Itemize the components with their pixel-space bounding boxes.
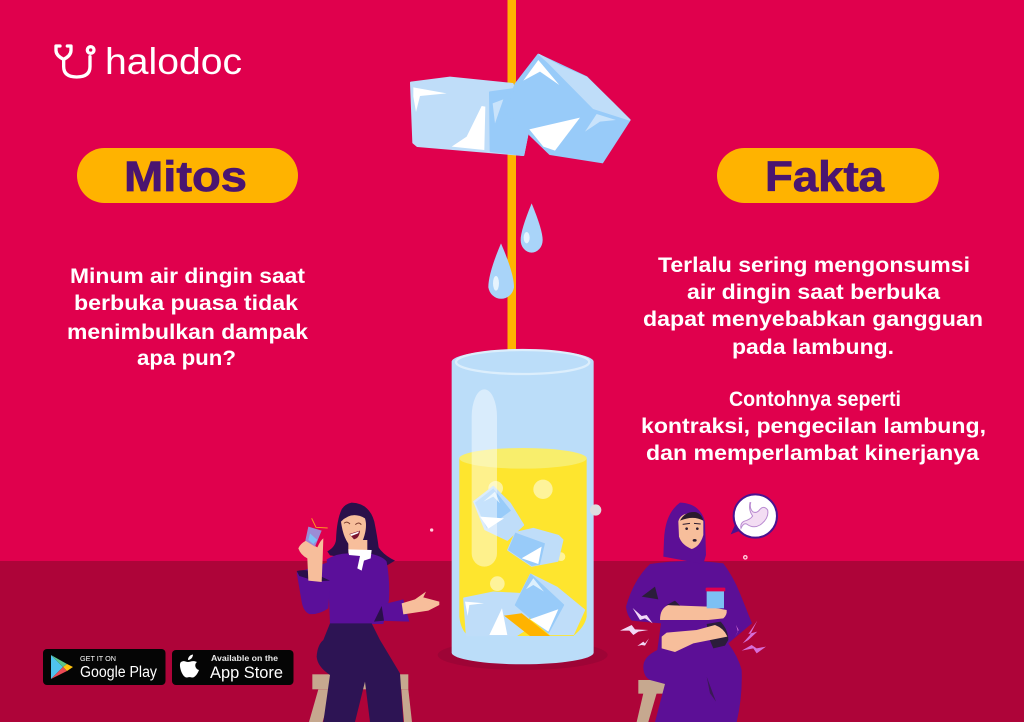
- text: fakta statement: Terlalu sering mengonsumsi: [658, 254, 970, 277]
- trousers: [317, 623, 403, 722]
- illustration: laughing woman with juice: [297, 503, 439, 722]
- text: fakta statement: pada lambung.: [732, 336, 894, 359]
- stool: [309, 674, 412, 722]
- hijab: [663, 503, 706, 564]
- face: [678, 513, 703, 549]
- upper arm and hand with glass: [660, 605, 727, 620]
- badge: Mitos: Mitos: [124, 153, 247, 201]
- button: Google Play: [43, 649, 166, 685]
- illustration: woman with stomach ache: [620, 494, 777, 722]
- sparkle: [744, 556, 747, 559]
- text: mitos statement: menimbulkan dampak: [67, 321, 308, 344]
- text: mitos statement: [67, 265, 308, 370]
- text: fakta statement: dan memperlambat kinerjanya: [646, 442, 979, 465]
- text: fakta statement: Contohnya seperti: [729, 388, 901, 411]
- text: fakta statement: kontraksi, pengecilan lambung,: [641, 415, 986, 438]
- icon: play logo: [51, 655, 73, 679]
- dress: [626, 561, 752, 722]
- speech bubble: stomach: [731, 494, 777, 538]
- open hand: [402, 592, 439, 614]
- blouse: [327, 553, 389, 624]
- cup: [706, 588, 725, 608]
- text: fakta statement: air dingin saat berbuka: [687, 281, 940, 304]
- button: App Store: [172, 650, 294, 685]
- text: mitos statement: berbuka puasa tidak: [74, 292, 298, 315]
- hair: [327, 503, 395, 566]
- lower arm and hand on stomach: [662, 625, 727, 652]
- juice box: [305, 518, 328, 547]
- text: mitos statement: apa pun?: [137, 347, 236, 370]
- scarf: [348, 549, 372, 571]
- button: Google Play: Google Play: [80, 664, 157, 681]
- logo: halodoc: [56, 41, 242, 82]
- text: fakta statement: dapat menyebabkan gangguan: [643, 308, 983, 331]
- logo: halodoc: halodoc: [105, 41, 242, 82]
- neck and face: [348, 540, 367, 556]
- button: App Store: Available on the: [211, 654, 279, 663]
- icon: apple logo: [180, 654, 199, 678]
- left sleeve: [297, 562, 330, 614]
- badge: Mitos: [77, 148, 298, 203]
- badge: Fakta: [717, 148, 939, 203]
- illustration: water drops: [488, 203, 543, 299]
- badge: Fakta: Fakta: [765, 153, 885, 201]
- illustration: ice cubes: [411, 55, 630, 162]
- pain marks: [620, 608, 766, 653]
- illustration: glass of iced drink: [438, 350, 608, 670]
- text: mitos statement: Minum air dingin saat: [70, 265, 305, 288]
- shadows: [642, 587, 658, 599]
- straw: [508, 0, 516, 352]
- button: Google Play: GET IT ON: [80, 654, 116, 663]
- raised arm and hand: [298, 538, 323, 582]
- stool: [637, 680, 666, 722]
- button: App Store: App Store: [210, 663, 283, 682]
- text: fakta statement: [641, 254, 986, 465]
- right sleeve: [380, 599, 409, 622]
- under sleeve: [707, 622, 728, 648]
- sparkle: [430, 528, 433, 532]
